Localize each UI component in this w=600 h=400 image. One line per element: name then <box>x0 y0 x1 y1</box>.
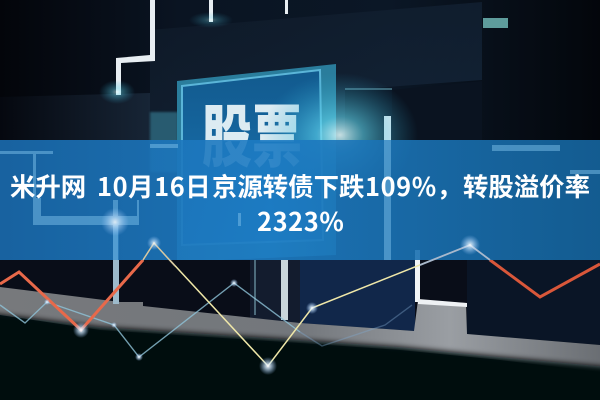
white neon lines <box>116 0 391 140</box>
line chart <box>0 243 600 375</box>
lower dark panels <box>0 260 600 345</box>
translucent blue banner <box>0 140 600 260</box>
upper dark panels <box>0 2 508 140</box>
vertical light towers <box>113 222 467 320</box>
central cyan glow <box>262 73 418 197</box>
light lines showing through the banner <box>0 140 600 260</box>
peak lines and sparkles over the banner <box>101 208 490 266</box>
chart sparkles <box>44 279 318 375</box>
headline: 2323% <box>257 203 344 239</box>
screen with the big characters <box>177 64 336 262</box>
bottom dark floor <box>0 312 600 400</box>
headline: 10月16日 <box>97 168 211 204</box>
headline: 米升网 <box>10 168 86 204</box>
headline: 转股溢价率 <box>463 168 590 204</box>
headline <box>10 168 590 239</box>
cyan glows <box>99 12 233 172</box>
headline: 京源转债下跌 <box>212 168 364 204</box>
big characters on screen: 股票 <box>202 84 302 182</box>
gray floor band <box>0 287 600 372</box>
headline: 109%， <box>365 168 463 204</box>
